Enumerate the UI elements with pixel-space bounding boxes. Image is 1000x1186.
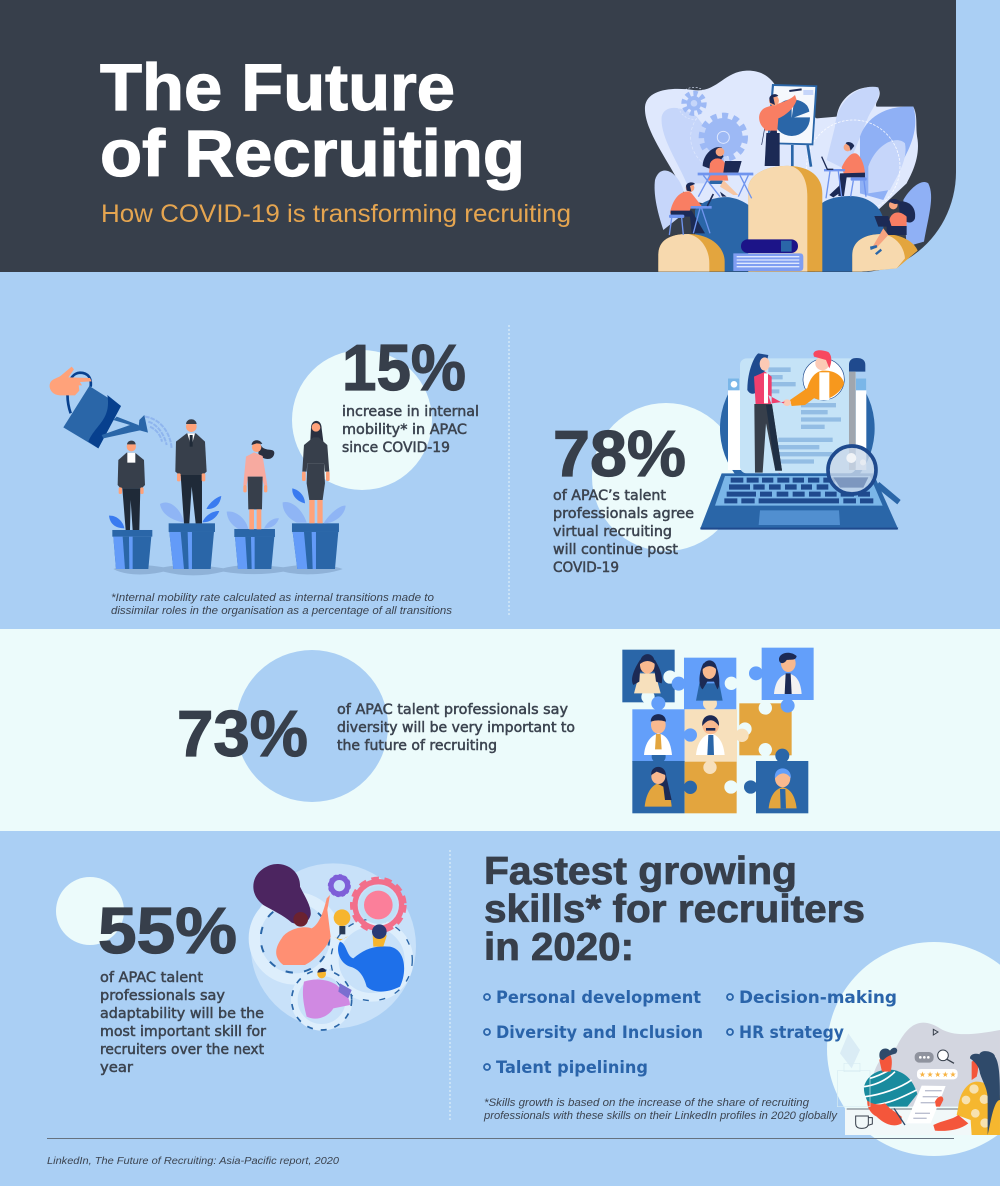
highlight circle <box>292 350 432 490</box>
footnote: skills growth: *Skills growth is based on the increase of the share of recruiting <box>484 1097 810 1109</box>
footnote: internal mobility: *Internal mobility rate calculated as internal transitions made to <box>111 592 434 604</box>
description: increase in internal <box>342 404 479 420</box>
description: diversity will be very important to <box>337 720 575 736</box>
stat 15%: 15% <box>342 331 466 404</box>
illustration: team on pedestals <box>645 71 931 272</box>
description: adaptability will be the <box>100 1006 264 1022</box>
title: The Future <box>100 50 455 124</box>
panel: header <box>0 0 956 272</box>
skills list: Decision-making <box>739 988 897 1008</box>
heading <box>484 850 865 969</box>
description: virtual recruiting <box>553 524 672 540</box>
heading: skills* for recruiters <box>484 888 865 931</box>
description <box>337 702 575 754</box>
description: year <box>100 1060 133 1076</box>
illustration: laptop and handshake <box>700 350 901 530</box>
description: professionals say <box>100 988 225 1004</box>
highlight circle with illustration: ★★★★★ <box>919 1070 956 1079</box>
illustration: puzzle of people <box>622 648 814 813</box>
skills list <box>484 988 897 1078</box>
stat 78%: 78% <box>553 417 686 490</box>
description: most important skill for <box>100 1024 266 1040</box>
stat 55%: 55% <box>98 894 237 967</box>
heading: in 2020: <box>484 926 634 969</box>
band background <box>0 629 1000 831</box>
skills list: Diversity and Inclusion <box>496 1023 703 1043</box>
footnote: skills growth <box>483 1097 839 1122</box>
panel: diversity band <box>0 629 1000 831</box>
description: professionals agree <box>553 506 694 522</box>
subtitle: How COVID-19 is transforming recruiting <box>101 200 571 228</box>
footnote: skills growth: professionals with these skills on their LinkedIn profiles in 2020 globally <box>483 1110 839 1122</box>
description <box>342 404 479 456</box>
footnote: internal mobility <box>111 592 453 617</box>
highlight circle with illustration <box>827 942 1000 1156</box>
description: the future of recruiting <box>337 738 497 754</box>
panel: virtual recruiting stat <box>553 350 901 576</box>
footnote: internal mobility: dissimilar roles in the organisation as a percentage of all transitions <box>111 605 453 617</box>
source line: LinkedIn, The Future of Recruiting: Asia-Pacific report, 2020 <box>47 1156 339 1167</box>
illustration: watering people in pots <box>50 367 346 575</box>
panel: adaptability stat <box>56 863 416 1076</box>
description: of APAC talent <box>100 970 204 986</box>
description: will continue post <box>553 542 679 558</box>
illustration: gears and people <box>251 863 416 1030</box>
heading: Fastest growing <box>484 850 797 893</box>
highlight circle <box>592 403 740 551</box>
highlight circle <box>236 650 388 802</box>
title: of Recruiting <box>100 116 525 190</box>
description: mobility* in APAC <box>342 422 467 438</box>
description: COVID-19 <box>553 560 619 576</box>
description: of APAC talent professionals say <box>337 702 568 718</box>
header dark shape <box>0 0 956 272</box>
skills list: HR strategy <box>739 1023 844 1043</box>
description <box>553 488 694 576</box>
title <box>100 50 525 190</box>
panel: fastest growing skills <box>483 850 1000 1156</box>
panel: internal mobility stat <box>50 331 479 617</box>
highlight circle <box>56 877 124 945</box>
description: of APAC’s talent <box>553 488 667 504</box>
description: since COVID-19 <box>342 440 450 456</box>
description <box>100 970 266 1076</box>
stat 73%: 73% <box>177 697 308 770</box>
skills list: Talent pipelining <box>496 1058 648 1078</box>
skills list: Personal development <box>496 988 701 1008</box>
description: recruiters over the next <box>100 1042 264 1058</box>
